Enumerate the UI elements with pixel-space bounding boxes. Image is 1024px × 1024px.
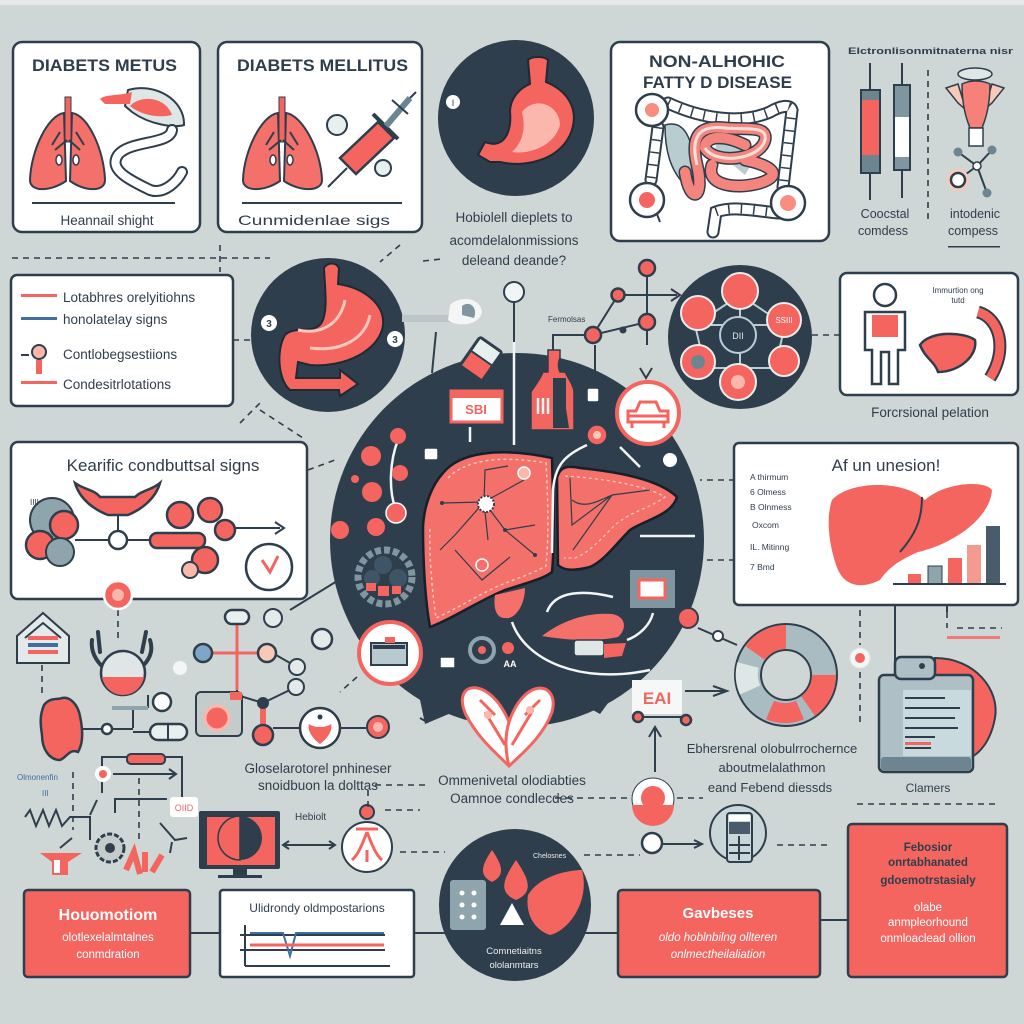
- top right: test tubes and reproductive organ: intodenic: [950, 207, 1000, 221]
- stomach circle with arrow: 3: [392, 335, 398, 346]
- icon: red ring node: [555, 727, 703, 826]
- legend rows: Contlobegsestiions: [63, 347, 177, 362]
- icon: stomach in dark circle: I: [452, 98, 454, 108]
- panel: red box causes: [618, 890, 820, 977]
- panel: red box behavior: anmpleorhound: [888, 917, 968, 929]
- side labels: IL. Mitinng: [750, 542, 789, 552]
- icon: clipboard and pie: [879, 657, 996, 795]
- legend rows: honolatelay signs: [63, 312, 168, 327]
- icon: red heart circle: [273, 677, 389, 748]
- icon: circle markers: [327, 115, 391, 176]
- panel: red box houomotiom: conmdration: [76, 949, 140, 961]
- icon: liver and colon: [920, 312, 1000, 378]
- bottom left circuit diagram: OIID: [175, 803, 194, 813]
- top right: test tubes and reproductive organ: [848, 46, 1014, 248]
- icon: gear: [358, 550, 412, 604]
- captions: Coocstal: [861, 207, 909, 221]
- divider: [242, 202, 402, 204]
- icon: right liver lobe: [557, 467, 677, 570]
- panel: non-alcoholic fatty liver disease: FATTY D DISEASE: [643, 73, 792, 92]
- diagram: [26, 483, 292, 590]
- network circle: SSIII: [775, 316, 793, 325]
- dark circle with drops: Comnetiaitns: [486, 946, 542, 957]
- bottom left circuit diagram: [17, 754, 198, 875]
- panel: red box behavior: onrtabhanated: [888, 857, 968, 869]
- icon: liver: [829, 484, 992, 585]
- icon: uterus with antlers: [92, 632, 187, 728]
- panel: non-alcoholic fatty liver disease: [611, 42, 829, 241]
- icon: colon: [651, 103, 792, 232]
- heading: diabets mellitus: DIABETS MELLITUS: [237, 56, 408, 75]
- icon: molecule cross: [194, 609, 332, 745]
- panel: red box behavior: gdoemotrstasialy: [880, 875, 976, 887]
- diagram: IIII: [30, 498, 39, 507]
- heading: diabets metus: DIABETS METUS: [32, 56, 177, 75]
- icon: test tubes: [861, 63, 910, 200]
- central text block: acomdelalonmissions: [449, 233, 579, 248]
- network circle: [668, 265, 812, 409]
- icon: monitor: [199, 811, 280, 878]
- panel: red box behavior: onmloaclead ollion: [880, 933, 976, 945]
- icon: phone device: [584, 805, 828, 862]
- text block: comorbid conditions: Ommenivetal olodiabties: [438, 773, 586, 788]
- panel: red box behavior: [848, 824, 1007, 977]
- network connector: Fermolsas: [548, 315, 585, 324]
- icon: capsule with motion trail: [402, 299, 482, 324]
- panel: body and liver: [840, 273, 1018, 395]
- icon: human figure: [865, 284, 905, 384]
- text block: right condition: eand Febend diessds: [708, 780, 833, 795]
- network circle: DII: [732, 331, 744, 341]
- central text block: deleand deande?: [462, 253, 566, 268]
- bar chart: [893, 526, 1006, 584]
- panel: diabetes mellitus lungs and syringe: [218, 42, 422, 232]
- icon: EAI card with arrow: [632, 680, 727, 725]
- small heading: Elctronlisonmitnaterna nisr: [848, 46, 1014, 56]
- main dark circle: [330, 340, 704, 727]
- icon: lungs: [243, 97, 322, 189]
- icon: syringe: [328, 92, 416, 187]
- satellite cells: [331, 428, 408, 539]
- stomach circle with arrow: 3: [266, 319, 272, 330]
- connector lines: [12, 245, 848, 933]
- panel: red box behavior: Febosior: [904, 842, 953, 854]
- dark circle with drops: ololanmtars: [489, 960, 539, 971]
- divider: [32, 202, 175, 204]
- node below clinical panel: [104, 581, 132, 640]
- network connector: [504, 260, 680, 378]
- side labels: B Olnmess: [750, 502, 792, 512]
- heading: NON-ALHOHIC: [649, 52, 785, 71]
- icon: SBI card and bottle: SBI: [465, 402, 487, 417]
- node on circle: [587, 425, 607, 445]
- icon: cycle ring: [678, 608, 824, 713]
- panel: clinical signs: [11, 442, 307, 599]
- side labels: 6 Olmess: [750, 487, 786, 497]
- panel: red box behavior: olabe: [914, 902, 942, 914]
- top right: test tubes and reproductive organ: comdess: [858, 224, 908, 238]
- text block: right condition: aboutmelalathmon: [719, 760, 825, 775]
- bottom left circuit diagram: III: [42, 789, 49, 798]
- panel: red box houomotiom: Houomotiom: [59, 907, 157, 924]
- icon: lungs: [30, 97, 105, 189]
- icon: red circle with car: [617, 382, 679, 444]
- text block: comorbid conditions: [438, 773, 586, 806]
- panel: red box houomotiom: [24, 890, 190, 977]
- panel: red box causes: Gavbeses: [683, 905, 753, 922]
- small text: Immurtion ong: [932, 286, 984, 295]
- caption: Forcrsional pelation: [871, 405, 989, 420]
- icon: EAI card with arrow: EAI: [643, 689, 671, 708]
- caption: Heannail shight: [60, 213, 154, 228]
- icon: person circle: [283, 805, 445, 872]
- panel: red box causes: onlmectheilaliation: [671, 949, 765, 961]
- panel: legend: [11, 275, 233, 406]
- icon: large left liver: [423, 452, 554, 627]
- labelled tags: [424, 388, 677, 669]
- panel: liver and bar chart: [734, 443, 1018, 605]
- panel: red box causes: oldo hoblnbilng ollteren: [659, 932, 777, 944]
- bottom left circuit diagram: Olmonenfin: [17, 773, 58, 782]
- heading: Kearific condbuttsal signs: [67, 456, 259, 475]
- legend rows: Lotabhres orelyitiohns: [63, 290, 195, 305]
- heart in speech bubble: [462, 688, 553, 766]
- text block: comorbid conditions: Oamnoe condlecdes: [450, 791, 574, 806]
- side labels: [750, 472, 792, 572]
- side labels: 7 Bmd: [750, 562, 775, 572]
- divider: dashed: [927, 70, 929, 220]
- top right: test tubes and reproductive organ: compess: [948, 224, 998, 238]
- heading: Af un unesion!: [832, 456, 940, 475]
- icon: heart organ with connector: [41, 698, 187, 760]
- icon: house with flag: [17, 613, 69, 697]
- curved arrows: [470, 340, 695, 674]
- dark circle with drops: Chelosnes: [533, 853, 567, 860]
- icon: stomach in dark circle: [438, 40, 594, 196]
- dark circle with drops: [439, 829, 591, 981]
- labelled tags: AA: [504, 659, 517, 669]
- side labels: Oxcom: [752, 520, 779, 530]
- caption: Cunmidenlae sigs: [238, 212, 390, 228]
- central text block: [449, 210, 579, 268]
- icon: uterus: [946, 68, 1004, 198]
- legend rows: Condesitrlotations: [63, 377, 171, 392]
- central text block: Hobiolell dieplets to: [455, 210, 573, 225]
- panel: body and liver: tutd: [951, 296, 965, 305]
- bottom left: house, uterus and molecule cluster: [17, 609, 389, 760]
- icon: red circle with monitor: [359, 622, 421, 684]
- icon: small intestine: [665, 124, 773, 194]
- small indicators: [850, 605, 1002, 804]
- icon: cell circles: [630, 94, 805, 222]
- icon: pancreas and intestine: [100, 88, 184, 191]
- icon: clipboard and pie: Clamers: [906, 781, 950, 795]
- panel: red box houomotiom: olotlexelalmtalnes: [62, 932, 154, 944]
- legend rows: [21, 290, 195, 392]
- text block: right condition: Ebhersrenal olobulrrochernce: [687, 741, 857, 756]
- icon: lower liver: [542, 614, 626, 658]
- panel: white line chart: Ulidrondy oldmpostarions: [249, 901, 385, 915]
- text block: clinical conditions: [244, 761, 392, 793]
- panel: diabetes mellitus lungs and pancreas: [13, 42, 200, 232]
- text block: clinical conditions: Gloselarotorel pnhineser: [244, 761, 392, 776]
- text block: right condition: [687, 741, 857, 795]
- icon: report card: [630, 570, 675, 608]
- text block: clinical conditions: snoidbuon la dolttas: [258, 778, 378, 793]
- side labels: A thirmum: [750, 472, 788, 482]
- panel: white line chart: [220, 890, 414, 977]
- stomach circle with arrow: [251, 258, 405, 412]
- icon: SBI card and bottle: [451, 335, 574, 430]
- label: habitual: Hebiolt: [295, 812, 326, 823]
